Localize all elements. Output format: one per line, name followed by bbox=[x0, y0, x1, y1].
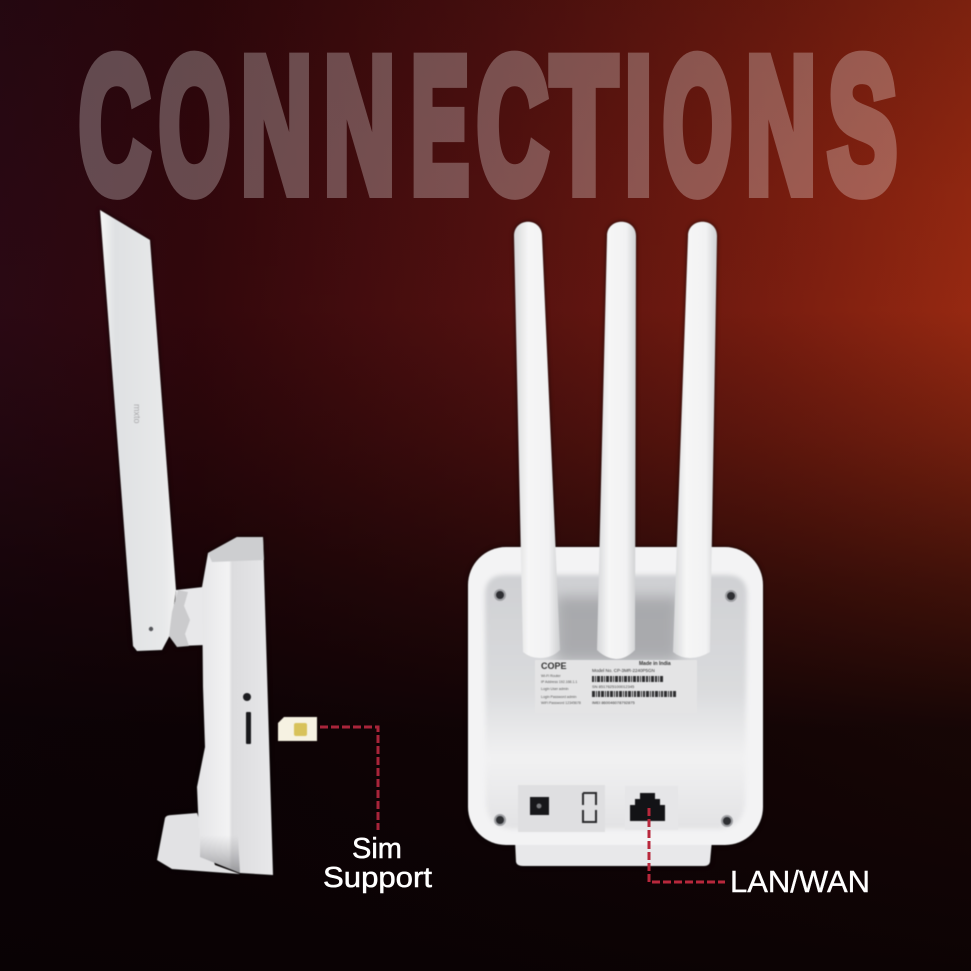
panel: product label: SN 8517625100012345 bbox=[592, 684, 635, 689]
icon: side button hole bbox=[243, 693, 251, 701]
icon: side antenna: mxto bbox=[132, 404, 142, 424]
title: T bbox=[551, 19, 617, 232]
icon: reset switch bbox=[583, 793, 596, 822]
side-view router bbox=[100, 210, 273, 875]
panel: product label: Login Password admin bbox=[541, 695, 576, 699]
label: sim support: Support bbox=[323, 862, 432, 894]
icon: router back shell bbox=[468, 547, 763, 845]
panel: product label: Login User admin bbox=[541, 687, 568, 691]
icon: sim slot bbox=[246, 712, 251, 744]
title: O bbox=[159, 19, 230, 232]
icon: three antennas bbox=[514, 222, 717, 659]
panel: ports right bbox=[625, 786, 678, 830]
title: N bbox=[746, 19, 816, 232]
icon: screws bbox=[495, 590, 736, 826]
panel: product label bbox=[535, 660, 697, 713]
barcodes bbox=[592, 676, 664, 682]
title: S bbox=[828, 19, 897, 232]
label: sim support: Sim bbox=[352, 833, 402, 865]
back-view router bbox=[468, 222, 763, 866]
panel: product label: IP Address 192.168.1.1 bbox=[541, 680, 577, 684]
icon: router foot bbox=[515, 840, 712, 866]
icon: antenna hinge bbox=[169, 587, 205, 647]
title: C bbox=[79, 19, 150, 232]
title: E bbox=[411, 19, 469, 232]
icon: side antenna bbox=[100, 210, 176, 651]
title: N bbox=[241, 19, 312, 232]
icon: sim card bbox=[278, 717, 317, 741]
connector: lan line bbox=[649, 808, 725, 882]
panel: product label: COPE bbox=[541, 661, 567, 671]
panel: product label: Wi-Fi Router bbox=[541, 674, 561, 678]
title bbox=[79, 19, 897, 232]
title: C bbox=[477, 19, 548, 232]
title: N bbox=[324, 19, 395, 232]
title: I bbox=[625, 19, 652, 232]
shadow behind antennas bbox=[555, 596, 680, 662]
panel: product label: IMEI 860046078792875 bbox=[592, 700, 635, 705]
icon: ethernet port bbox=[630, 793, 665, 821]
connector: sim line bbox=[320, 727, 378, 830]
icon: power jack bbox=[530, 797, 549, 815]
icon: router foot bbox=[157, 813, 240, 874]
title: O bbox=[663, 19, 732, 232]
label: lan wan: LAN/WAN bbox=[730, 864, 870, 899]
panel: product label: WiFi Password 12345678 bbox=[541, 701, 581, 705]
label: sim support bbox=[323, 833, 432, 894]
icon: router side body bbox=[197, 537, 273, 875]
panel: product label: Model No. CP-3MR-2240P5GN bbox=[592, 668, 655, 673]
panel: product label: Made in India bbox=[639, 661, 671, 667]
panel: ports left bbox=[518, 785, 605, 832]
panel: recessed back bbox=[485, 575, 747, 829]
